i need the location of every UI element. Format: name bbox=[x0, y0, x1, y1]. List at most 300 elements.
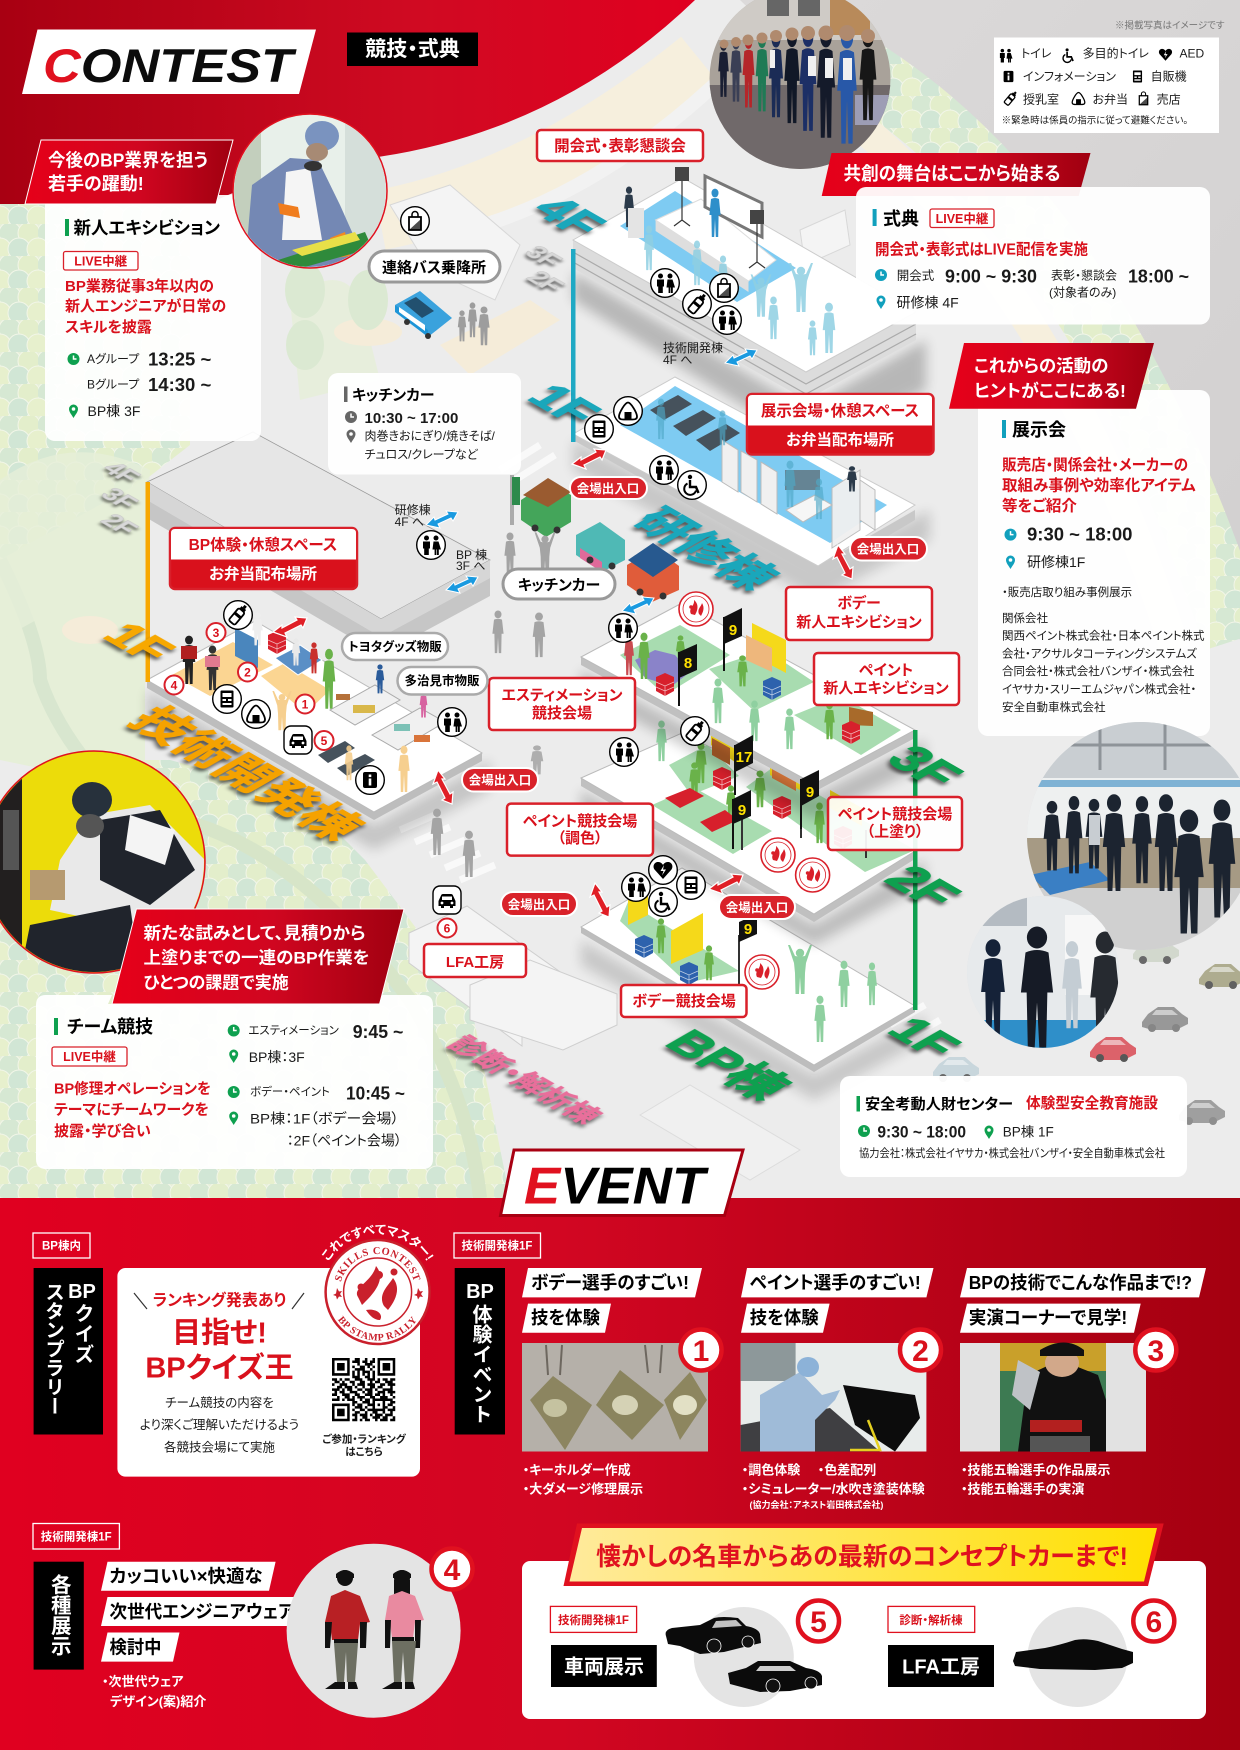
floor label: 2F: 2F bbox=[94, 510, 144, 539]
icon: toilet bbox=[651, 269, 679, 297]
pill: トヨタグッズ物販 bbox=[342, 633, 448, 660]
block: 各種展示: 各種展示 bbox=[47, 1573, 71, 1656]
legend: AED bbox=[1180, 46, 1205, 60]
bus stop illustration bbox=[395, 291, 490, 345]
header bbox=[960, 1268, 1206, 1333]
arrow: red double 3 bbox=[433, 770, 453, 804]
photo: exhibition booth bbox=[981, 896, 1118, 1048]
description bbox=[1002, 456, 1196, 515]
icon: wheelchair bbox=[649, 888, 677, 916]
description bbox=[140, 1396, 299, 1454]
callout: 今後のBP業界: 若手の躍動! bbox=[48, 174, 144, 194]
floor label: 2F: 2F bbox=[520, 267, 570, 296]
pill: 会場出入口: 会場出入口 bbox=[469, 772, 531, 788]
label: 研修棟4Fへ: 4F へ bbox=[395, 515, 424, 529]
number badge 1: 1 bbox=[693, 1335, 709, 1368]
company list bbox=[1002, 585, 1205, 714]
headline: BPクイズ王 bbox=[145, 1350, 294, 1384]
floor label: 4F: 4F bbox=[96, 458, 146, 487]
arrow: blue double 2 bbox=[446, 576, 478, 593]
header: 技を体験 bbox=[750, 1308, 819, 1328]
schedule: 研修棟1F bbox=[1027, 554, 1085, 570]
stamp: SKILLS CONTEST bbox=[322, 1224, 434, 1346]
note: photo disclaimer: ※掲載写真はイメージです bbox=[1115, 20, 1225, 32]
pill: 連絡バス乗降所 bbox=[369, 251, 500, 282]
QR caption: はこちら bbox=[345, 1446, 383, 1458]
description: 新人エンジニアが日常の bbox=[65, 297, 226, 315]
arrow: blue double 4 bbox=[622, 597, 654, 614]
label: ペイント競技会場（調色）: ペイント競技会場 bbox=[523, 812, 637, 830]
description: 取組み事例や効率化アイテム bbox=[1002, 476, 1196, 495]
photo: demonstration bbox=[960, 1342, 1146, 1452]
icon: car bbox=[284, 726, 312, 754]
icon: bento bbox=[242, 700, 270, 728]
tag: BP棟内 bbox=[33, 1233, 90, 1258]
panel: 展示会 bbox=[978, 390, 1210, 736]
partners: 協力会社：株式会社イヤサカ・株式会社バンザイ・安全自動車株式会社 bbox=[859, 1146, 1165, 1160]
panel: 式典 bbox=[856, 187, 1210, 324]
icon: nursing room bbox=[681, 717, 709, 745]
label: BP体験・休憩スペース: BP体験・休憩スペース bbox=[189, 535, 337, 554]
panel: 新人エキシビション bbox=[45, 195, 261, 441]
description: 各競技会場にて実施 bbox=[164, 1440, 276, 1454]
label: ペイント競技会場（上塗り） bbox=[828, 797, 962, 850]
1F floor bbox=[573, 377, 930, 600]
number badge 2 bbox=[900, 1330, 941, 1370]
icon: toilet bbox=[622, 873, 650, 901]
schedule bbox=[1004, 524, 1132, 570]
time: 10:30 ~ 17:00 bbox=[364, 410, 458, 427]
upper floors stack bbox=[147, 432, 490, 655]
callout: 今後のBP業界 bbox=[25, 140, 233, 204]
bullets bbox=[961, 1462, 1110, 1497]
heading: 安全考動人財センター bbox=[865, 1095, 1013, 1113]
panel: BPクイズ王 bbox=[117, 1224, 434, 1477]
map numbers: 5 bbox=[321, 734, 328, 748]
legend: ※緊急時は係員の指示に従って避難ください。 bbox=[1002, 115, 1188, 127]
map numbers: 1 bbox=[302, 698, 309, 712]
callout: これからの活動: ヒントがここにある! bbox=[974, 381, 1126, 401]
legend: 授乳室 bbox=[1023, 91, 1059, 106]
icon: vending bbox=[677, 871, 705, 899]
pill: 会場出入口: 会場出入口 bbox=[508, 897, 570, 912]
header bbox=[741, 1268, 934, 1333]
figure: male uniform bbox=[325, 1570, 370, 1689]
legend: トイレ bbox=[1021, 46, 1051, 60]
label: ペイント競技会場（調色）: （調色） bbox=[557, 829, 603, 847]
number badge 6 bbox=[1133, 1600, 1174, 1642]
label: LFA工房 bbox=[424, 944, 526, 977]
label: 研修棟4Fへ bbox=[395, 502, 431, 529]
building: BP棟 bbox=[581, 603, 974, 1107]
pill: キッチンカー bbox=[503, 569, 615, 599]
pill: 会場出入口 bbox=[570, 477, 647, 499]
description: 等をご紹介 bbox=[1002, 496, 1077, 515]
1F floor bbox=[147, 612, 490, 850]
icon: shop bbox=[401, 207, 429, 235]
title banner: CONTEST bbox=[22, 30, 316, 94]
heading: 体験型安全教育施設 bbox=[1026, 1094, 1158, 1112]
company list: ・販売店取り組み事例展示 bbox=[1002, 585, 1132, 599]
stamp spots on map bbox=[679, 592, 830, 989]
photo: exhibition hall bbox=[1027, 722, 1240, 958]
company list: 関西ペイント株式会社・日本ペイント株式 bbox=[1002, 628, 1205, 642]
icon: car bbox=[433, 886, 461, 914]
cyan floor line bbox=[571, 249, 576, 442]
panel: チーム競技 bbox=[36, 995, 433, 1169]
number badge 3 bbox=[1135, 1330, 1176, 1370]
arrow: blue double 3 bbox=[725, 349, 757, 366]
floor label: 3F: 3F bbox=[518, 242, 568, 271]
label: エスティメーション競技会場: エスティメーション bbox=[502, 687, 623, 704]
label: LFA工房: LFA工房 bbox=[446, 954, 504, 971]
pill: 会場出入口 bbox=[719, 895, 795, 919]
label: 開会式・表彰懇談会 bbox=[537, 130, 703, 161]
pill: キッチンカー: キッチンカー bbox=[518, 577, 600, 594]
arrow: red double 1 bbox=[572, 449, 606, 469]
subtitle: 競技・式典 bbox=[347, 32, 478, 66]
label: ペイント新人エキシビション: ペイント bbox=[859, 662, 913, 679]
map numbers: 6 bbox=[444, 922, 451, 936]
description: 販売店・関係会社・メーカーの bbox=[1002, 456, 1188, 474]
tag: 技術開発棟1F: 技術開発棟1F bbox=[462, 1238, 532, 1252]
4F floor stack bbox=[573, 167, 926, 445]
schedule: 13:25 ~ bbox=[148, 348, 211, 370]
label: 展示会場・休憩スペース: 展示会場・休憩スペース bbox=[761, 401, 919, 420]
icon: toilet bbox=[609, 614, 637, 642]
headers: 次世代エンジニアウェア: 検討中 bbox=[110, 1638, 162, 1658]
bullets bbox=[523, 1462, 643, 1497]
company list: 関係会社 bbox=[1002, 611, 1048, 625]
schedule: 9:30 ~ 18:00 bbox=[1027, 524, 1132, 545]
bullets: ・大ダメージ修理展示 bbox=[523, 1482, 643, 1497]
legend: お弁当 bbox=[1092, 91, 1128, 106]
description: スキルを披露 bbox=[65, 319, 152, 336]
schedule: エスティメーション bbox=[248, 1025, 339, 1037]
icon: toilet bbox=[610, 738, 638, 766]
live tag: LIVE中継 bbox=[63, 1049, 116, 1064]
heading: チーム競技 bbox=[67, 1017, 153, 1037]
button: 車両展示 bbox=[551, 1645, 657, 1687]
bullets bbox=[102, 1674, 206, 1709]
title banner: EVENT bbox=[500, 1150, 743, 1216]
number flags: 9 bbox=[744, 921, 752, 938]
orange floor line bbox=[146, 482, 150, 682]
description: チーム競技の内容を bbox=[165, 1396, 274, 1410]
icon: shop bbox=[710, 274, 738, 302]
label: ペイント競技会場（調色） bbox=[507, 804, 653, 856]
pill: トヨタグッズ物販: トヨタグッズ物販 bbox=[348, 639, 442, 654]
button: 車両展示: 車両展示 bbox=[564, 1656, 644, 1679]
banner: 懐かしの名車: 懐かしの名車からあの最新のコンセプトカーまで! bbox=[596, 1543, 1128, 1571]
floor label: 1F: 1F bbox=[516, 377, 612, 432]
panel: 安全考動人財センター bbox=[840, 1076, 1187, 1177]
header: 実演コーナーで見学! bbox=[969, 1307, 1127, 1328]
figure: female uniform bbox=[382, 1570, 424, 1689]
bullets bbox=[742, 1462, 925, 1510]
number badge 4 bbox=[432, 1548, 472, 1590]
number badge 2: 2 bbox=[912, 1335, 929, 1368]
label: ボデー新人エキシビション: 新人エキシビション bbox=[796, 613, 922, 631]
label: 技術開発棟4Fへ: 4F へ bbox=[663, 353, 693, 367]
schedule: 10:45 ~ bbox=[346, 1083, 405, 1103]
label: ペイント競技会場（上塗り）: ペイント競技会場 bbox=[838, 805, 952, 823]
block: BPクイズスタンプラリー bbox=[34, 1268, 103, 1434]
live tag: LIVE中継 bbox=[74, 254, 128, 268]
callout: 新たな試み bbox=[112, 909, 404, 1004]
label: エスティメーション競技会場: 競技会場 bbox=[532, 704, 592, 722]
label: ペイント新人エキシビション bbox=[814, 653, 959, 705]
number flags bbox=[678, 608, 819, 942]
label: 技術開発棟4Fへ bbox=[663, 340, 723, 367]
schedule: ボデー・ペイント bbox=[250, 1085, 330, 1099]
schedule bbox=[68, 348, 211, 419]
company list: 会社・アクサルタコーティングシステムズ bbox=[1002, 646, 1197, 660]
icon: info bbox=[356, 766, 384, 794]
heading: キッチンカー bbox=[352, 387, 435, 404]
schedule: 9:30 ~ 18:00 bbox=[877, 1123, 966, 1142]
bullets: ・調色体験 bbox=[742, 1462, 800, 1477]
header: ペイント選手のすごい! bbox=[750, 1272, 921, 1293]
building: 技術開発棟 bbox=[92, 432, 490, 850]
label: ボデー新人エキシビション bbox=[786, 587, 932, 640]
bullets: ・技能五輪選手の作品展示 bbox=[961, 1462, 1110, 1477]
passers-by silhouettes bbox=[431, 532, 555, 877]
floor label: 3F: 3F bbox=[94, 484, 144, 513]
tag: 技術開発棟1F: 技術開発棟1F bbox=[41, 1530, 112, 1544]
legend: 多目的トイレ bbox=[1083, 45, 1149, 60]
icon: toilet bbox=[438, 708, 466, 736]
schedule: BP棟：1F（ボデー会場） bbox=[250, 1110, 399, 1126]
pill: 会場出入口: 会場出入口 bbox=[577, 481, 639, 496]
floor label: 3F: 3F bbox=[875, 738, 974, 795]
floor label: 2F: 2F bbox=[873, 858, 972, 915]
arrow: blue double 1 bbox=[426, 511, 458, 528]
panel: キッチンカー bbox=[328, 373, 521, 474]
building name: 技術開発棟: 技術開発棟 bbox=[118, 701, 374, 847]
map background bbox=[0, 0, 1240, 1200]
block: BP体験イベント: 体験イベント bbox=[469, 1304, 492, 1424]
company list: イヤサカ・スリーエムジャパン株式会社・ bbox=[1002, 682, 1196, 696]
panel: 車両展示 bbox=[522, 1561, 1206, 1719]
building: 研修棟 bbox=[516, 167, 930, 600]
schedule: 研修棟 4F bbox=[896, 294, 959, 310]
photo: rookie worker bbox=[233, 114, 387, 275]
block: 各種展示 bbox=[34, 1562, 84, 1670]
uniform display bbox=[287, 1544, 461, 1718]
block: BPクイズスタンプラリー: クイズ bbox=[71, 1303, 93, 1364]
number flags: 9 bbox=[738, 802, 746, 819]
floor label: 4F: 4F bbox=[521, 189, 617, 244]
arrow: red double 5 bbox=[709, 874, 743, 894]
number badge 5 bbox=[798, 1600, 839, 1642]
map numbers: 2 bbox=[244, 666, 251, 680]
icon: bento bbox=[614, 397, 642, 425]
label: ペイント新人エキシビション: 新人エキシビション bbox=[823, 679, 949, 697]
schedule: 18:00 ~ bbox=[1128, 266, 1189, 286]
tag: 技術開発棟1F: 技術開発棟1F bbox=[558, 1613, 629, 1627]
building name: 研修棟: 研修棟 bbox=[623, 502, 788, 596]
menu: チュロス/クレープなど bbox=[364, 448, 479, 462]
pill: 連絡バス乗降所: 連絡バス乗降所 bbox=[382, 258, 486, 276]
tag: 技術開発棟1F bbox=[33, 1524, 119, 1549]
stamp: SKILLS CONTEST: SKILLS CONTEST bbox=[335, 1247, 420, 1282]
label: ペイント競技会場（上塗り）: （上塗り） bbox=[867, 824, 923, 840]
cars on circle bbox=[666, 1607, 822, 1707]
label: 技術開発棟4Fへ: 技術開発棟 bbox=[663, 340, 723, 355]
number badge 4: 4 bbox=[444, 1554, 461, 1587]
number flags: 9 bbox=[729, 622, 737, 639]
title banner: CONTEST: CONTEST bbox=[43, 39, 298, 92]
building name: BP棟: BP棟 bbox=[654, 1023, 800, 1107]
kitchen cars bbox=[510, 475, 679, 602]
pill: 会場出入口: 会場出入口 bbox=[857, 542, 919, 556]
bullets: (協力会社：アネスト岩田株式会社) bbox=[750, 1499, 883, 1510]
pill: 会場出入口: 会場出入口 bbox=[726, 900, 788, 915]
headline: 目指せ! bbox=[172, 1316, 267, 1350]
legend bbox=[994, 38, 1219, 133]
3F floor bbox=[581, 603, 925, 820]
legend: 売店 bbox=[1157, 91, 1181, 106]
schedule: 9:00 ~ 9:30 bbox=[945, 266, 1037, 286]
pill: 多治見市物販: 多治見市物販 bbox=[404, 673, 480, 688]
legend: インフォメーション bbox=[1023, 69, 1117, 83]
schedule bbox=[228, 1022, 405, 1148]
label: 研修棟4Fへ: 研修棟 bbox=[395, 502, 431, 517]
bullets: デザイン(案)紹介 bbox=[110, 1694, 206, 1709]
schedule: 表彰・懇談会 bbox=[1051, 267, 1117, 282]
block: BP体験イベント bbox=[455, 1268, 505, 1434]
description: 開会式・表彰式はLIVE配信を実施 bbox=[875, 240, 1088, 258]
floor label: 1F: 1F bbox=[876, 1010, 972, 1065]
header: BPの技術でこんな作品まで!? bbox=[969, 1272, 1192, 1293]
label: エスティメーション競技会場 bbox=[489, 678, 635, 730]
icon: vending bbox=[213, 685, 241, 713]
schedule: Bグループ bbox=[87, 378, 139, 392]
menu bbox=[346, 429, 496, 462]
schedule bbox=[858, 1123, 1054, 1142]
number flags: 17 bbox=[736, 749, 752, 766]
subtitle: 競技・式典: 競技・式典 bbox=[365, 38, 460, 61]
label: ボデー新人エキシビション: ボデー bbox=[837, 594, 881, 612]
bullets: ・色差配列 bbox=[818, 1462, 876, 1477]
callout: 共創の舞台: 共創の舞台はここから始まる bbox=[844, 163, 1060, 184]
schedule: 開会式 bbox=[897, 269, 935, 283]
live tag bbox=[64, 252, 138, 270]
label: BP体験・休憩スペース: お弁当配布場所 bbox=[209, 564, 317, 583]
tag: 技術開発棟1F bbox=[454, 1233, 540, 1258]
header bbox=[522, 1268, 702, 1333]
map numbers bbox=[164, 623, 456, 938]
banner: 懐かしの名車 bbox=[564, 1524, 1164, 1586]
photo: team contest painter bbox=[0, 750, 210, 980]
icon: wheelchair bbox=[678, 471, 706, 499]
description: 披露・学び合い bbox=[54, 1122, 151, 1140]
schedule: 14:30 ~ bbox=[148, 374, 211, 395]
ranking line: ランキング発表あり bbox=[153, 1290, 286, 1309]
icon: toilet bbox=[417, 531, 445, 559]
bullets: ・キーホルダー作成 bbox=[523, 1462, 631, 1477]
schedule: Aグループ bbox=[87, 352, 139, 366]
schedule bbox=[875, 266, 1189, 310]
number badge 1 bbox=[680, 1330, 722, 1370]
description bbox=[65, 277, 226, 336]
schedule: ：2F（ペイント会場） bbox=[287, 1132, 402, 1148]
column: ボデー選手 bbox=[522, 1268, 708, 1497]
callout: これからの活動: これからの活動の bbox=[974, 356, 1108, 376]
heading bbox=[856, 1094, 1158, 1113]
schedule: 9:45 ~ bbox=[353, 1022, 403, 1042]
label: 展示会場・休憩スペース bbox=[747, 394, 934, 454]
heading: 新人エキシビション bbox=[74, 218, 220, 238]
LFA silhouette on circle bbox=[1013, 1607, 1133, 1707]
header: ボデー選手のすごい! bbox=[531, 1272, 689, 1293]
icon: AED bbox=[649, 856, 677, 884]
company list: 合同会社・株式会社バンザイ・株式会社 bbox=[1002, 664, 1195, 678]
description: BP業務従事3年以内の bbox=[65, 277, 214, 295]
tag: 診断・解析棟 bbox=[888, 1606, 975, 1632]
label: 開会式・表彰懇談会: 開会式・表彰懇談会 bbox=[554, 136, 686, 155]
arrow: red double 4 bbox=[273, 617, 307, 637]
icon: nursing room bbox=[683, 290, 711, 318]
QR caption: ご参加・ランキング bbox=[322, 1432, 407, 1445]
live tag bbox=[52, 1047, 127, 1066]
description: より深くご理解いただけるよう bbox=[140, 1417, 299, 1432]
photo: spray painter bbox=[741, 1343, 926, 1452]
number flags: 9 bbox=[806, 784, 814, 801]
pill: 多治見市物販 bbox=[398, 667, 488, 694]
heading: 式典 bbox=[883, 208, 919, 229]
schedule: (対象者のみ) bbox=[1049, 286, 1116, 300]
icon: nursing room bbox=[224, 601, 252, 629]
label: BP棟3Fへ: 3F へ bbox=[456, 559, 486, 573]
schedule: BP棟 3F bbox=[88, 403, 140, 419]
stamp: SKILLS CONTEST: BP STAMP RALLY bbox=[338, 1316, 416, 1341]
menu: 肉巻きおにぎり/焼きそば/ bbox=[364, 429, 496, 443]
tag: 技術開発棟1F bbox=[550, 1606, 637, 1632]
QR caption bbox=[322, 1432, 407, 1458]
block: BPクイズスタンプラリー: BP bbox=[68, 1281, 96, 1303]
headers: 次世代エンジニアウェア bbox=[101, 1562, 307, 1662]
event section background bbox=[0, 1198, 1240, 1750]
button: LFA工房: LFA工房 bbox=[902, 1657, 980, 1679]
callout: 新たな試み: 上塗りまでの一連のBP作業を bbox=[144, 948, 370, 968]
header: 技を体験 bbox=[531, 1308, 600, 1328]
1F floor bbox=[581, 868, 925, 1100]
number flags: 8 bbox=[684, 655, 692, 672]
map numbers: 3 bbox=[213, 626, 220, 640]
red header shape bbox=[0, 0, 695, 204]
legend: 自販機 bbox=[1151, 69, 1187, 83]
bullets: ・技能五輪選手の実演 bbox=[961, 1482, 1084, 1497]
block: BP体験イベント: BP bbox=[466, 1281, 494, 1303]
QR code bbox=[332, 1359, 395, 1420]
callout: 新たな試み: 新たな試みとして、見積りから bbox=[144, 924, 366, 943]
live tag bbox=[930, 209, 994, 228]
schedule: BP棟：3F bbox=[249, 1049, 305, 1065]
callout: 今後のBP業界: 今後のBP業界を担う bbox=[48, 150, 208, 170]
pill: 会場出入口 bbox=[462, 768, 538, 792]
number badge 3: 3 bbox=[1147, 1335, 1164, 1368]
button: LFA工房 bbox=[888, 1645, 994, 1687]
arrow: red double 6 bbox=[590, 883, 610, 917]
map numbers: 4 bbox=[171, 678, 178, 692]
headers: 次世代エンジニアウェア: 次世代エンジニアウェア bbox=[110, 1602, 295, 1622]
headline bbox=[145, 1316, 294, 1384]
description: BP修理オペレーションを bbox=[54, 1080, 211, 1098]
label: ボデー競技会場: ボデー競技会場 bbox=[632, 992, 736, 1010]
number badge 5: 5 bbox=[810, 1606, 827, 1639]
